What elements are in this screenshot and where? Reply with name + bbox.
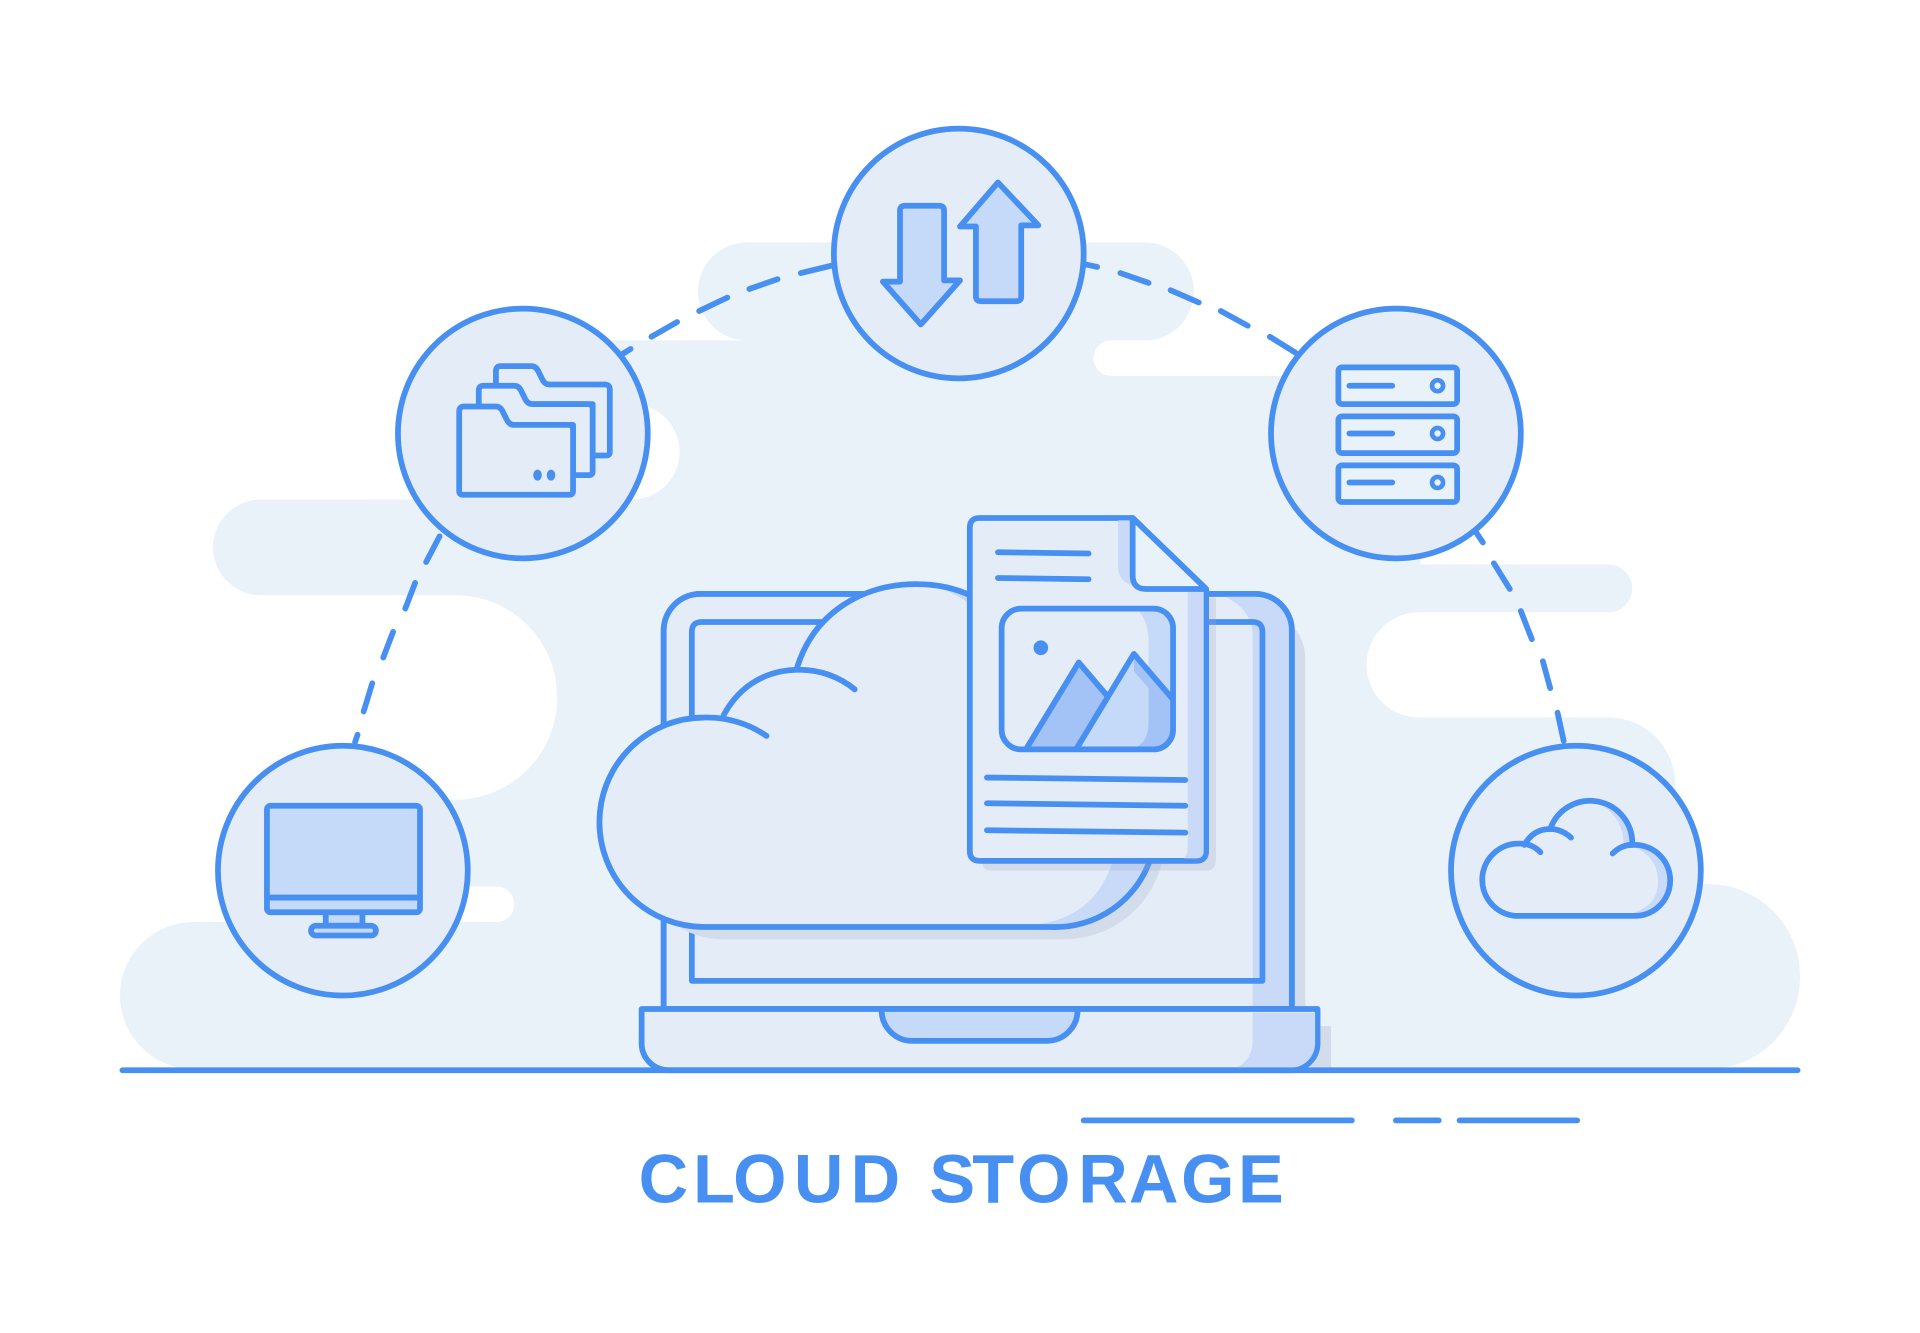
large cloud bbox=[599, 584, 1163, 939]
document text lines bbox=[987, 552, 1185, 833]
laptop bbox=[642, 594, 1331, 1070]
laptop base bbox=[642, 1009, 1318, 1070]
circle: folders bbox=[398, 309, 648, 558]
document bbox=[970, 518, 1216, 871]
circle: transfer arrows bbox=[834, 129, 1084, 378]
icon: upload arrow bbox=[960, 182, 1038, 301]
cloud shadow bbox=[681, 735, 1163, 939]
dashed connection arc bbox=[355, 264, 1564, 742]
icon: folders bbox=[459, 366, 610, 495]
icon: monitor bbox=[267, 806, 420, 936]
icon: download arrow bbox=[883, 206, 960, 324]
laptop lid bbox=[664, 594, 1292, 1009]
icon: small cloud bbox=[1482, 801, 1670, 916]
icon: server stack bbox=[1338, 367, 1457, 502]
document shadow bbox=[982, 598, 1216, 871]
decorative underline dashes bbox=[1084, 1118, 1577, 1123]
circle: monitor bbox=[218, 746, 468, 996]
circle: small cloud bbox=[1451, 746, 1701, 996]
title: CLOUD STORAGE bbox=[639, 1140, 1284, 1217]
cloud outline bbox=[599, 718, 1151, 927]
ground line bbox=[122, 1068, 1798, 1073]
circle: servers bbox=[1271, 309, 1521, 558]
document picture bbox=[1002, 609, 1173, 749]
document page bbox=[970, 518, 1206, 861]
cloud body bbox=[599, 584, 1151, 927]
laptop screen bbox=[692, 622, 1253, 981]
laptop shadow bbox=[1273, 618, 1331, 1070]
laptop notch bbox=[882, 1009, 1078, 1041]
background cloud shape bbox=[120, 242, 1881, 1069]
